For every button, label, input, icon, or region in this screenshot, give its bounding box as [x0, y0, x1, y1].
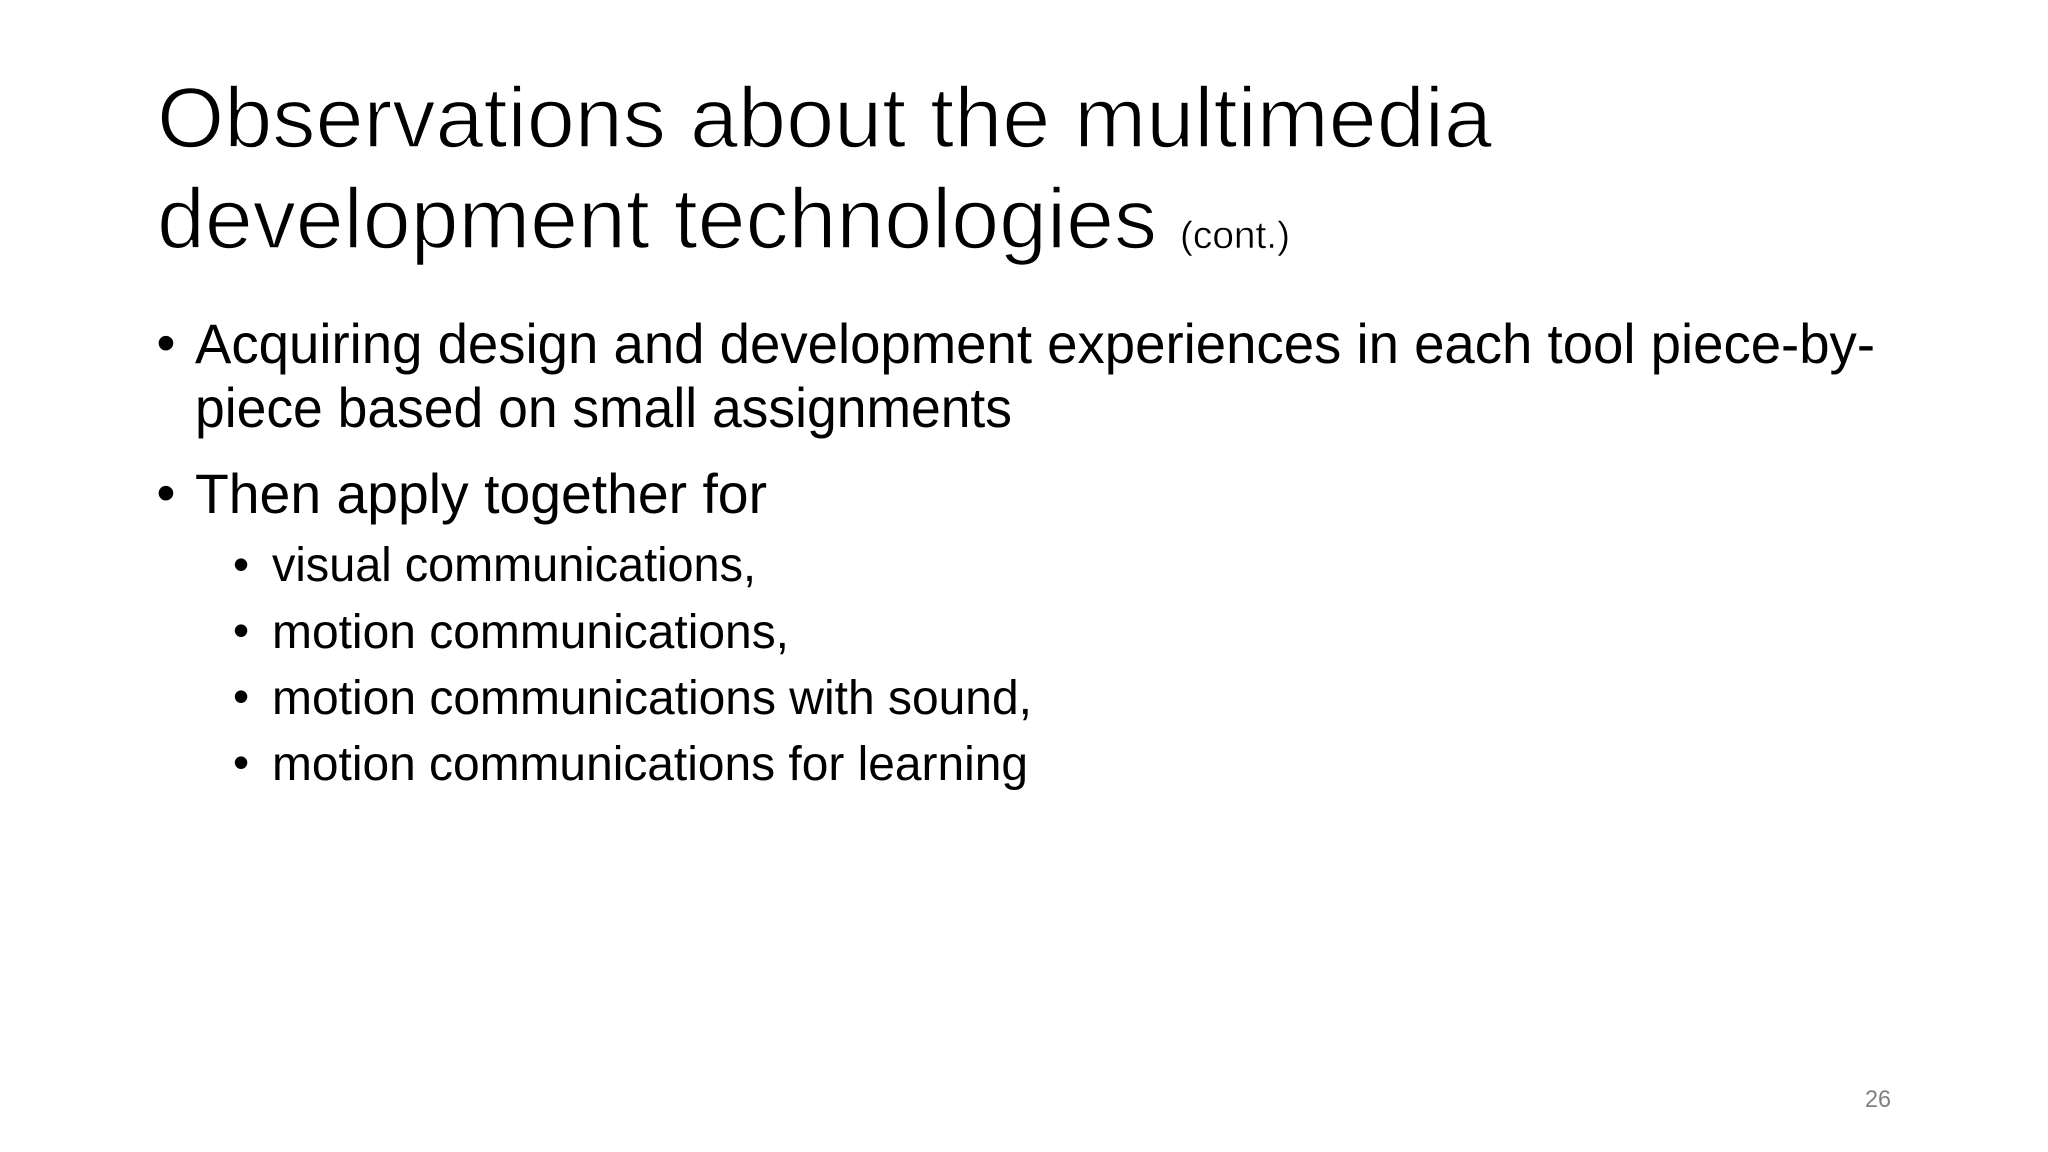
sub-bullet: motion communications with sound: • — [233, 670, 249, 722]
sub-bullet: motion communications: • — [233, 604, 249, 656]
page number: 26 — [1865, 1086, 1891, 1113]
bullet: acquiring experience: Acquiring design and development experiences in each tool piece-by- — [195, 312, 1875, 375]
sub-bullet: visual communications: visual communications, — [272, 539, 756, 592]
sub-bullet: motion communications: motion communications, — [272, 606, 789, 659]
bullet: acquiring experience — [157, 312, 1875, 439]
bullet: acquiring experience: • — [157, 313, 175, 373]
bullet: acquiring experience: piece based on small assignments — [195, 376, 1012, 439]
bullet: then apply together: Then apply together for — [195, 462, 767, 525]
sub-bullet: motion communications for learning: • — [233, 736, 249, 788]
title: Observations about the multimedia — [157, 71, 1493, 166]
sub-bullet: visual communications: • — [233, 538, 249, 590]
sub-bullet: motion communications with sound: motion communications with sound, — [272, 672, 1032, 725]
title: (cont.) — [1180, 215, 1290, 257]
sub-list of communications — [233, 538, 1032, 791]
title — [157, 71, 1493, 267]
sub-bullet: motion communications for learning: motion communications for learning — [272, 738, 1028, 791]
bullet: then apply together: • — [157, 463, 175, 523]
title: development technologies — [157, 172, 1157, 267]
